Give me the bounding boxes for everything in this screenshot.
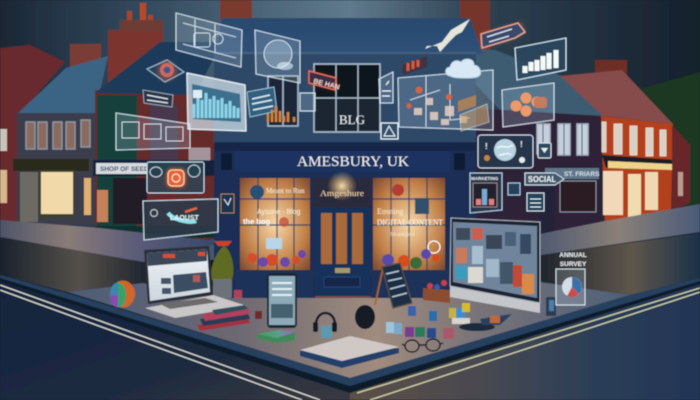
central building roof — [215, 0, 483, 54]
stack of books — [197, 305, 250, 331]
small plaque on facade — [221, 194, 234, 213]
left shop window — [240, 178, 310, 270]
side roads — [0, 233, 700, 300]
far-left red brick building — [0, 45, 65, 222]
floating panel: three icon cards — [116, 113, 190, 150]
floating panel: bar chart — [515, 38, 566, 80]
upper window — [314, 64, 380, 132]
shopfront and fascia — [214, 143, 476, 172]
headphones — [313, 313, 337, 338]
floating panel: envelope chart — [176, 13, 242, 67]
colored blocks — [386, 303, 470, 339]
platform kerb — [0, 275, 700, 393]
right shop window — [373, 178, 445, 270]
floating panel: small bar chart — [470, 173, 502, 213]
floating panel: video still — [143, 199, 218, 240]
small text tile — [189, 148, 210, 160]
floating panel: radar disc — [255, 30, 300, 83]
upper side window — [268, 76, 298, 126]
annual survey hologram: ANNUAL — [559, 252, 587, 259]
small orange bars behind window — [268, 106, 294, 122]
door transom sign: Amgeshure — [320, 189, 365, 198]
small red cubes — [234, 290, 262, 319]
floating panel: waveform chart — [187, 73, 246, 131]
floating panel: globe: ! — [520, 140, 523, 149]
right shop window: Eosning — [377, 207, 403, 216]
small icon tiles — [508, 183, 544, 211]
tall left chimney — [108, 3, 163, 100]
left shop window: Meant to Run — [266, 187, 305, 195]
annual survey hologram: SURVEY — [560, 261, 587, 268]
right dark brick house: ST. FRIARS — [564, 171, 600, 178]
shop door — [315, 208, 371, 300]
foreground platform — [67, 282, 630, 378]
flower crate — [423, 280, 450, 303]
open book — [300, 336, 399, 368]
chalkboard sign — [375, 263, 412, 308]
desktop monitor — [450, 218, 540, 313]
triangle icon tile — [381, 123, 398, 139]
right dark brick house — [440, 0, 603, 242]
right shop window: Strategies — [390, 232, 415, 238]
neon sign: BE HAN — [313, 78, 340, 91]
red alert tag — [402, 56, 427, 75]
neon sign — [308, 70, 340, 91]
sidewalks — [0, 204, 700, 262]
eye icon — [147, 60, 184, 82]
floating panel: workflow diagram — [398, 70, 493, 131]
left house with cream shop window — [13, 44, 108, 225]
left shop window: Aysone - Blog — [257, 209, 301, 216]
arrow sign — [481, 22, 525, 48]
floating panel: small bar chart: MARKETING — [471, 176, 499, 181]
small glass tile — [300, 93, 315, 111]
central navy facade — [214, 52, 476, 300]
floating panel: instagram icon — [147, 162, 204, 193]
right orange shop building — [560, 60, 690, 226]
window ledges — [235, 270, 449, 299]
floating panel: globe — [478, 135, 533, 168]
floating panel: article cards — [247, 87, 277, 117]
right shop window: DIGITAL CONTENT — [377, 217, 444, 227]
airplane — [425, 19, 470, 52]
annual survey hologram — [556, 252, 587, 305]
floating panel: small text card — [379, 72, 393, 103]
cloud icon — [446, 59, 481, 78]
heading: AMESBURY, UK: AMESBURY, UK — [297, 154, 409, 170]
heart tile — [538, 143, 551, 158]
items on table right — [452, 297, 556, 331]
reading glasses — [402, 339, 443, 352]
dark earpiece — [355, 305, 375, 329]
green building — [93, 42, 222, 240]
rainbow tape ring — [110, 280, 135, 308]
road left — [0, 281, 350, 400]
double road lines — [0, 285, 700, 400]
left shop window: the bog — [243, 217, 270, 226]
road right — [350, 284, 700, 400]
far-right green hill — [630, 72, 700, 210]
laptop — [144, 246, 247, 318]
smartphone — [267, 273, 297, 328]
upper window: BLG — [339, 112, 365, 127]
arrow sign: SOCIAL: SOCIAL — [528, 175, 556, 184]
door transom sign — [313, 171, 371, 208]
floating panel: globe: ! — [485, 142, 488, 151]
potted plant — [211, 241, 233, 298]
floating panel: hexagon tiles — [502, 83, 554, 127]
dark label plaque — [143, 90, 173, 107]
arrow sign: SOCIAL — [525, 173, 564, 185]
gradient box — [257, 330, 295, 343]
green building: SHOP OF SEED — [100, 166, 149, 173]
floating panel: video still: LAOUST — [170, 215, 200, 222]
sky — [0, 0, 700, 260]
